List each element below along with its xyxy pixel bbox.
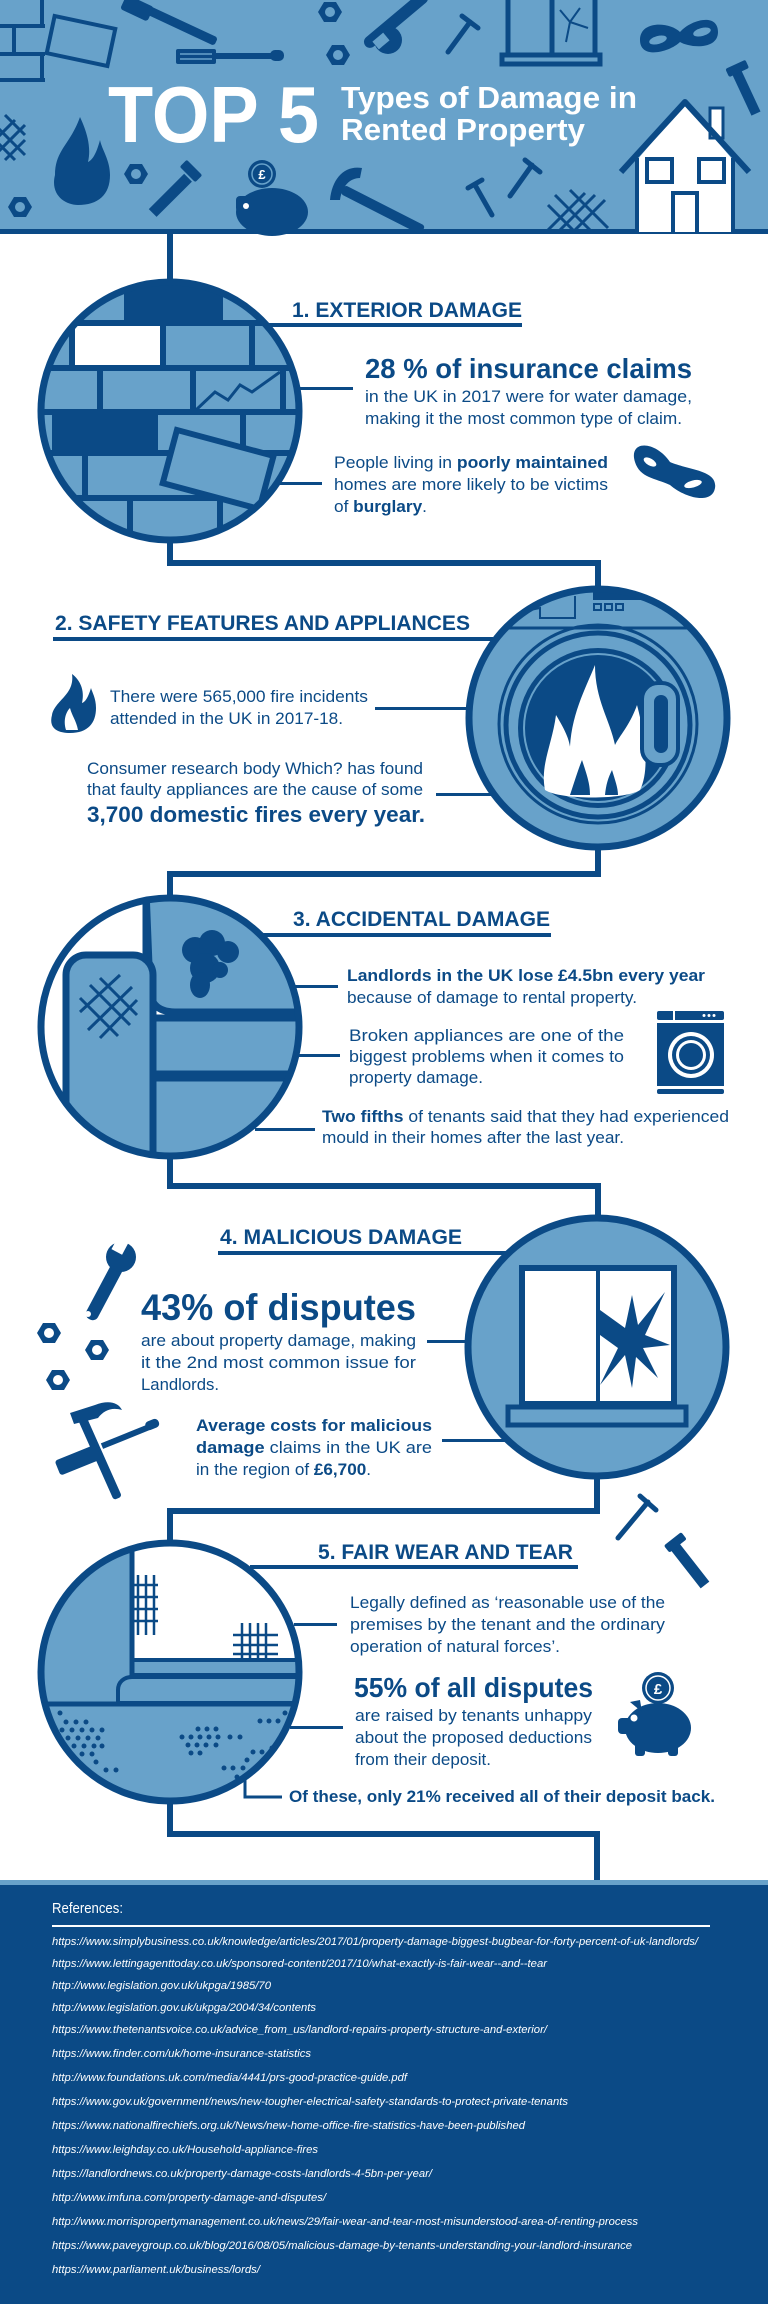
footer: references: http://www.imfuna.com/property-damage-and-disputes/: [52, 2192, 327, 2204]
footer: references: https://www.gov.uk/government/news/new-tougher-electrical-safety-standards-to-protect-private-tenants: [52, 2096, 569, 2108]
footer: references: https://www.finder.com/uk/home-insurance-statistics: [52, 2048, 312, 2060]
stat: 43% of disputes: it the 2nd most common issue for: [141, 1353, 416, 1372]
stat: 55% of all disputes: [290, 1672, 593, 1769]
text: two fifths: Two fifths of tenants said that they had experienced: [322, 1107, 729, 1126]
text: broken appliances: biggest problems when it comes to: [349, 1047, 624, 1066]
icon: screw: [664, 1532, 709, 1588]
text: two fifths: mould in their homes after the last year.: [322, 1128, 624, 1147]
text: average costs: in the region of £6,700.: [196, 1460, 371, 1479]
heading: 4. MALICIOUS DAMAGE: [220, 1226, 462, 1249]
text: fire incidents: [110, 687, 468, 728]
stat: 55% of all disputes: 55% of all disputes: [354, 1672, 593, 1703]
icon: piggy bank: £: [654, 1681, 663, 1698]
text: average costs: [196, 1416, 505, 1479]
stat: insurance claims: 28 % of insurance claims: [365, 353, 692, 384]
text: average costs: damage claims in the UK are: [196, 1438, 432, 1457]
text: landlords lose: because of damage to rental property.: [347, 988, 637, 1007]
circle illustration: broken window: [468, 1218, 726, 1476]
icon: crosshatch left: [0, 115, 25, 160]
stat: insurance claims: [299, 353, 692, 428]
text: burglary: of burglary.: [334, 497, 427, 516]
text: fire incidents: There were 565,000 fire incidents: [110, 687, 368, 706]
icon: hammer header: [330, 168, 425, 235]
icon: mask: [634, 446, 715, 498]
text: 21% received deposit: Of these, only 21% received all of their deposit back.: [289, 1787, 715, 1806]
text: legal definition: operation of natural forces’.: [350, 1637, 560, 1656]
text: landlords lose: Landlords in the UK lose £4.5bn every year: [347, 966, 705, 985]
text: legal definition: [294, 1593, 666, 1656]
title: TOP 5: [108, 70, 319, 159]
icon: crosshatch header: [548, 190, 608, 230]
text: domestic fires: that faulty appliances are the cause of some: [87, 780, 423, 799]
icon: wrench: [84, 1233, 136, 1322]
icon: screw header: [149, 160, 202, 217]
circle illustration: washing machine fire: [469, 586, 730, 847]
title: Types of Damage in: [341, 80, 637, 115]
text: broken appliances: Broken appliances are one of the: [349, 1026, 624, 1045]
icon: broken window top: [502, 0, 600, 64]
footer: references: https://www.paveygroup.co.uk/blog/2016/08/05/malicious-damage-by-tenants-understanding-your-landlord-insurance: [52, 2240, 632, 2252]
footer: references: https://www.parliament.uk/business/lords/: [52, 2264, 261, 2276]
heading: [250, 1541, 578, 1569]
text: domestic fires: 3,700 domestic fires every year.: [87, 802, 425, 827]
footer: references: http://www.morrispropertymanagement.co.uk/news/29/fair-wear-and-tear-most-misunderstood-area-of-renting-process: [52, 2216, 639, 2228]
icon: flame header: [54, 117, 110, 205]
panel: 1 exterior damage: [30, 270, 715, 545]
icon: washing machine: [657, 1011, 724, 1094]
stat: 55% of all disputes: are raised by tenants unhappy: [355, 1706, 593, 1725]
text: broken appliances: property damage.: [349, 1068, 483, 1087]
circle illustration: sofa: [38, 894, 302, 1160]
icon: piggy bank header: £: [258, 167, 266, 182]
text: burglary: homes are more likely to be victims: [334, 475, 608, 494]
text: legal definition: premises by the tenant and the ordinary: [350, 1615, 666, 1634]
panel: 2 safety features: [51, 586, 730, 847]
text: 21% received deposit: [245, 1776, 715, 1806]
stat: 43% of disputes: 43% of disputes: [141, 1287, 416, 1328]
footer: references: https://www.leighday.co.uk/Household-appliance-fires: [52, 2144, 319, 2156]
text: domestic fires: Consumer research body Which? has found: [87, 759, 423, 778]
footer: references: References:: [52, 1900, 123, 1917]
icon: flame: [51, 674, 96, 733]
stat: 55% of all disputes: from their deposit.: [355, 1750, 491, 1769]
icon: screw top right: [725, 60, 761, 116]
stat: 43% of disputes: are about property damage, making: [141, 1331, 416, 1350]
title: [108, 70, 637, 159]
heading: 3. ACCIDENTAL DAMAGE: [293, 908, 550, 931]
stat: 43% of disputes: Landlords.: [141, 1375, 219, 1394]
text: average costs: Average costs for malicious: [196, 1416, 432, 1435]
heading: 5. FAIR WEAR AND TEAR: [318, 1541, 573, 1564]
circle illustration: bricks: [38, 278, 302, 544]
icon: hammer and screwdriver: [55, 1402, 160, 1500]
icon: wrench top: [362, 0, 430, 54]
stat: 43% of disputes: [141, 1287, 467, 1394]
heading: 2. SAFETY FEATURES AND APPLIANCES: [55, 612, 470, 635]
footer: references: https://www.thetenantsvoice.co.uk/advice_from_us/landlord-repairs-property-structure-and-exterior/: [52, 2024, 548, 2036]
icon: nuts: [37, 1323, 109, 1390]
footer: references: https://www.lettingagenttoday.co.uk/sponsored-content/2017/10/what-exactly-is-fair-wear--and--tear: [52, 1958, 548, 1970]
footer: references: https://landlordnews.co.uk/property-damage-costs-landlords-4-5bn-per-year/: [52, 2168, 433, 2180]
footer: references: https://www.nationalfirechiefs.org.uk/News/new-home-office-fire-statistics-have-been-published: [52, 2120, 526, 2132]
footer: references: http://www.legislation.gov.uk/ukpga/1985/70: [52, 1980, 272, 1992]
icon: nails header: [468, 160, 540, 215]
text: burglary: [280, 453, 608, 516]
stat: insurance claims: in the UK in 2017 were for water damage,: [365, 387, 692, 406]
text: fire incidents: attended in the UK in 2017-18.: [110, 709, 343, 728]
heading: 1. EXTERIOR DAMAGE: [292, 299, 522, 322]
icon: house: [621, 102, 749, 232]
text: burglary: People living in poorly maintained: [334, 453, 608, 472]
icon: piggy bank: [618, 1672, 691, 1756]
panel: 4 malicious damage: [37, 1218, 726, 1588]
connector path: [170, 232, 598, 1882]
icon: mask top: [640, 20, 718, 52]
panel: 5 fair wear and tear: [30, 1530, 715, 1813]
footer: references: http://www.foundations.uk.com/media/4441/prs-good-practice-guide.pdf: [52, 2072, 408, 2084]
text: legal definition: Legally defined as ‘reasonable use of the: [350, 1593, 665, 1612]
footer: references: [0, 1880, 768, 2304]
icon: bricks: [0, 0, 115, 80]
circle illustration: room corner: [38, 1540, 302, 1804]
icon: hammer top: [120, 0, 218, 46]
footer: references: https://www.simplybusiness.co.uk/knowledge/articles/2017/01/property-damage-biggest-bugbear-for-forty-percent-of-uk-landlords/: [52, 1936, 699, 1948]
stat: insurance claims: making it the most common type of claim.: [365, 409, 682, 428]
stat: 55% of all disputes: about the proposed deductions: [355, 1728, 592, 1747]
icon: nail top: [448, 16, 478, 52]
text: domestic fires: [87, 759, 491, 827]
heading: [218, 1226, 508, 1255]
text: landlords lose: [295, 966, 705, 1007]
text: broken appliances: [298, 1026, 624, 1087]
panel: 3 accidental damage: [38, 894, 728, 1160]
footer: references: http://www.legislation.gov.uk/ukpga/2004/34/contents: [52, 2002, 317, 2014]
icon: screwdriver top: [176, 49, 284, 64]
header banner: [0, 0, 768, 236]
title: Rented Property: [341, 112, 586, 147]
icon: nail: [618, 1496, 656, 1538]
icon: nuts: [8, 2, 350, 217]
text: two fifths: [255, 1107, 729, 1147]
icon: piggy bank header: [236, 160, 308, 236]
